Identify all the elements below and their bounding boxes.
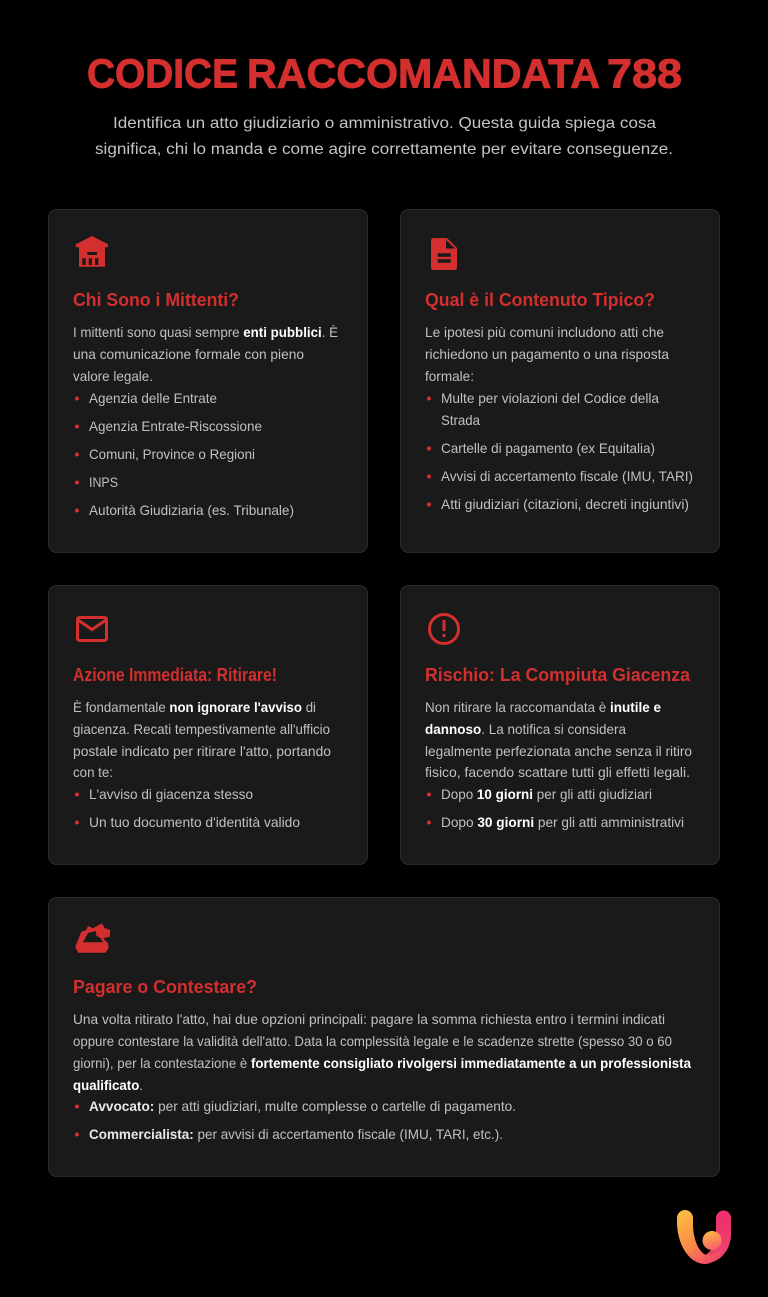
list	[75, 787, 300, 830]
text block: qualificato.	[73, 1078, 143, 1093]
subtitle	[95, 115, 673, 158]
list	[427, 787, 684, 830]
icon: exclamation circle	[430, 614, 458, 644]
icon: logo	[677, 1210, 731, 1264]
icon: handshake	[75, 923, 110, 953]
text block: È fondamentale non ignorare l'avviso di	[73, 700, 316, 715]
text block: Non ritirare la raccomandata è inutile e	[425, 700, 661, 715]
list: Atti giudiziari (citazioni, decreti ingiuntivi)	[441, 497, 689, 512]
text block: Una volta ritirato l'atto, hai due opzioni principali: pagare la somma richiesta entro i termini indicati	[73, 1012, 665, 1027]
heading: Rischio: La Compiuta Giacenza	[425, 665, 691, 685]
list: Avvocato: per atti giudiziari, multe complesse o cartelle di pagamento.	[89, 1099, 516, 1114]
list: Cartelle di pagamento (ex Equitalia)	[441, 441, 655, 456]
list: Un tuo documento d'identità valido	[89, 815, 300, 830]
list	[75, 1099, 516, 1142]
text block: Le ipotesi più comuni includono atti che	[425, 325, 664, 340]
text block: giorni), per la contestazione è fortemente consigliato rivolgersi immediatamente a un professionista	[73, 1056, 691, 1071]
panel: mittenti	[48, 210, 368, 552]
list: Strada	[441, 413, 480, 428]
list: L'avviso di giacenza stesso	[89, 787, 253, 802]
text block: valore legale.	[73, 369, 153, 384]
list: INPS	[89, 475, 118, 490]
panel: rischio	[400, 586, 720, 864]
list: Comuni, Province o Regioni	[89, 447, 255, 462]
list	[75, 391, 294, 518]
text block: una comunicazione formale con pieno	[73, 347, 304, 362]
text block: I mittenti sono quasi sempre enti pubblici. È	[73, 325, 338, 340]
list: Dopo 10 giorni per gli atti giudiziari	[441, 787, 652, 802]
heading: Qual è il Contenuto Tipico?	[425, 290, 655, 310]
text block	[73, 700, 331, 780]
text block: legalmente perfezionata anche senza il ritiro	[425, 744, 692, 759]
list: Avvisi di accertamento fiscale (IMU, TARI)	[441, 469, 693, 484]
icon: document	[431, 238, 457, 270]
text block: formale:	[425, 369, 474, 384]
heading: Chi Sono i Mittenti?	[73, 290, 239, 310]
list: Agenzia Entrate-Riscossione	[89, 419, 262, 434]
list: Agenzia delle Entrate	[89, 391, 217, 406]
text block: dannoso. La notifica si considera	[425, 722, 626, 737]
text block: postale indicato per ritirare l'atto, portando	[73, 744, 331, 759]
text block	[73, 1012, 691, 1093]
heading: Azione Immediata: Ritirare!	[73, 665, 277, 685]
subtitle: significa, chi lo manda e come agire correttamente per evitare conseguenze.	[95, 141, 673, 158]
panel: pagare o contestare	[48, 898, 720, 1176]
text block	[425, 325, 669, 384]
text block: giacenza. Recati tempestivamente all'ufficio	[73, 722, 330, 737]
list: Autorità Giudiziaria (es. Tribunale)	[89, 503, 294, 518]
title: CODICE	[87, 50, 238, 96]
heading: Pagare o Contestare?	[73, 977, 257, 997]
text block	[73, 325, 338, 384]
panel: azione immediata	[48, 586, 368, 864]
title: 788	[607, 50, 682, 96]
title	[87, 50, 682, 96]
text block	[425, 700, 692, 780]
icon: envelope	[78, 618, 106, 640]
title: RACCOMANDATA	[247, 50, 600, 96]
list: Commercialista: per avvisi di accertamento fiscale (IMU, TARI, etc.).	[89, 1127, 503, 1142]
text block: oppure contestare la validità dell'atto. Data la complessità legale e le scadenze strette (spesso 30 o 60	[73, 1034, 672, 1049]
list: Dopo 30 giorni per gli atti amministrativi	[441, 815, 684, 830]
text block: richiedono un pagamento o una risposta	[425, 347, 669, 362]
subtitle: Identifica un atto giudiziario o amministrativo. Questa guida spiega cosa	[113, 115, 656, 132]
panel: contenuto	[400, 210, 720, 552]
text block: fisico, facendo scattare tutti gli effetti legali.	[425, 765, 690, 780]
list	[427, 391, 693, 512]
list: Multe per violazioni del Codice della	[441, 391, 659, 406]
icon: building	[76, 236, 108, 267]
text block: con te:	[73, 765, 113, 780]
